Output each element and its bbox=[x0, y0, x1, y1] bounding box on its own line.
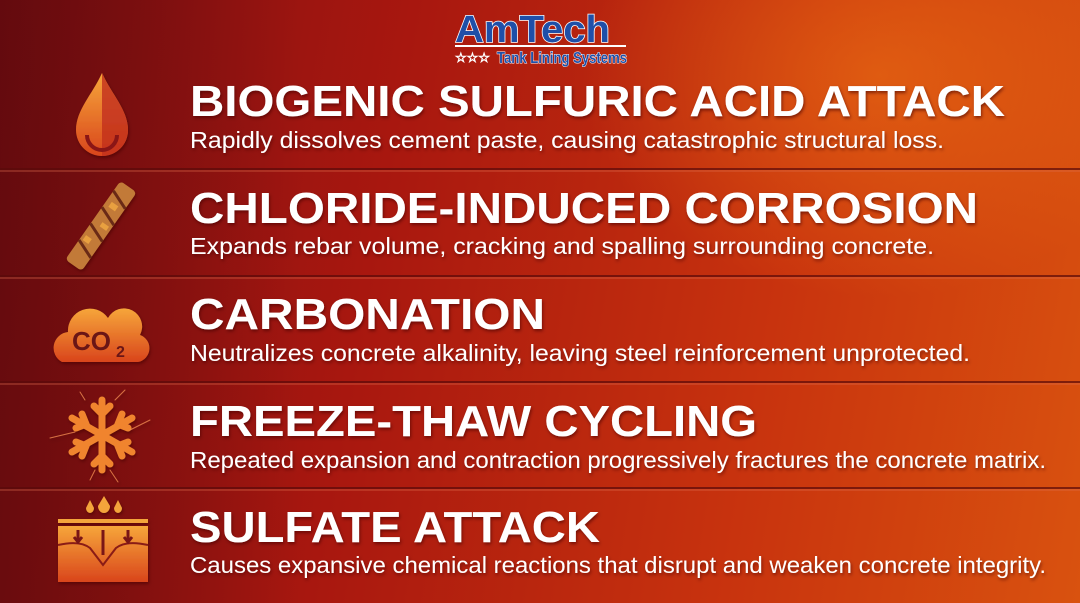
logo: Tank Lining Systems bbox=[497, 50, 627, 67]
icon: sulfate attack block bbox=[58, 496, 148, 582]
icon: cracked snowflake bbox=[50, 390, 150, 482]
row 3 text: Neutralizes concrete alkalinity, leaving steel reinforcement unprotected. bbox=[190, 340, 970, 366]
row 2 text bbox=[190, 184, 978, 259]
row 2 text: Expands rebar volume, cracking and spalling surrounding concrete. bbox=[190, 233, 934, 259]
icon: acid drop bbox=[76, 73, 128, 156]
logo bbox=[455, 9, 627, 67]
row 4 text: FREEZE-THAW CYCLING bbox=[190, 397, 757, 446]
row 5 text: Causes expansive chemical reactions that disrupt and weaken concrete integrity. bbox=[190, 552, 1046, 578]
row 4 text: Repeated expansion and contraction progressively fractures the concrete matrix. bbox=[190, 447, 1046, 473]
logo: ☆☆☆ bbox=[455, 50, 490, 65]
row 1 text: BIOGENIC SULFURIC ACID ATTACK bbox=[190, 77, 1005, 126]
row 5 text bbox=[190, 503, 1046, 578]
row 3 text: CARBONATION bbox=[190, 290, 545, 339]
row 1 text: Rapidly dissolves cement paste, causing catastrophic structural loss. bbox=[190, 127, 944, 153]
row 2 text: CHLORIDE-INDUCED CORROSION bbox=[190, 184, 978, 233]
icon: corroded rebar bbox=[65, 181, 137, 271]
row 5 text: SULFATE ATTACK bbox=[190, 503, 600, 552]
row 4 text bbox=[190, 397, 1046, 473]
row 3 text bbox=[190, 290, 970, 366]
icon: CO2 cloud: 2 bbox=[116, 344, 125, 361]
icon: CO2 cloud: CO bbox=[72, 326, 111, 356]
icon: CO2 cloud bbox=[54, 308, 149, 362]
logo: AmTech bbox=[455, 9, 610, 51]
row 1 text bbox=[190, 77, 1005, 153]
